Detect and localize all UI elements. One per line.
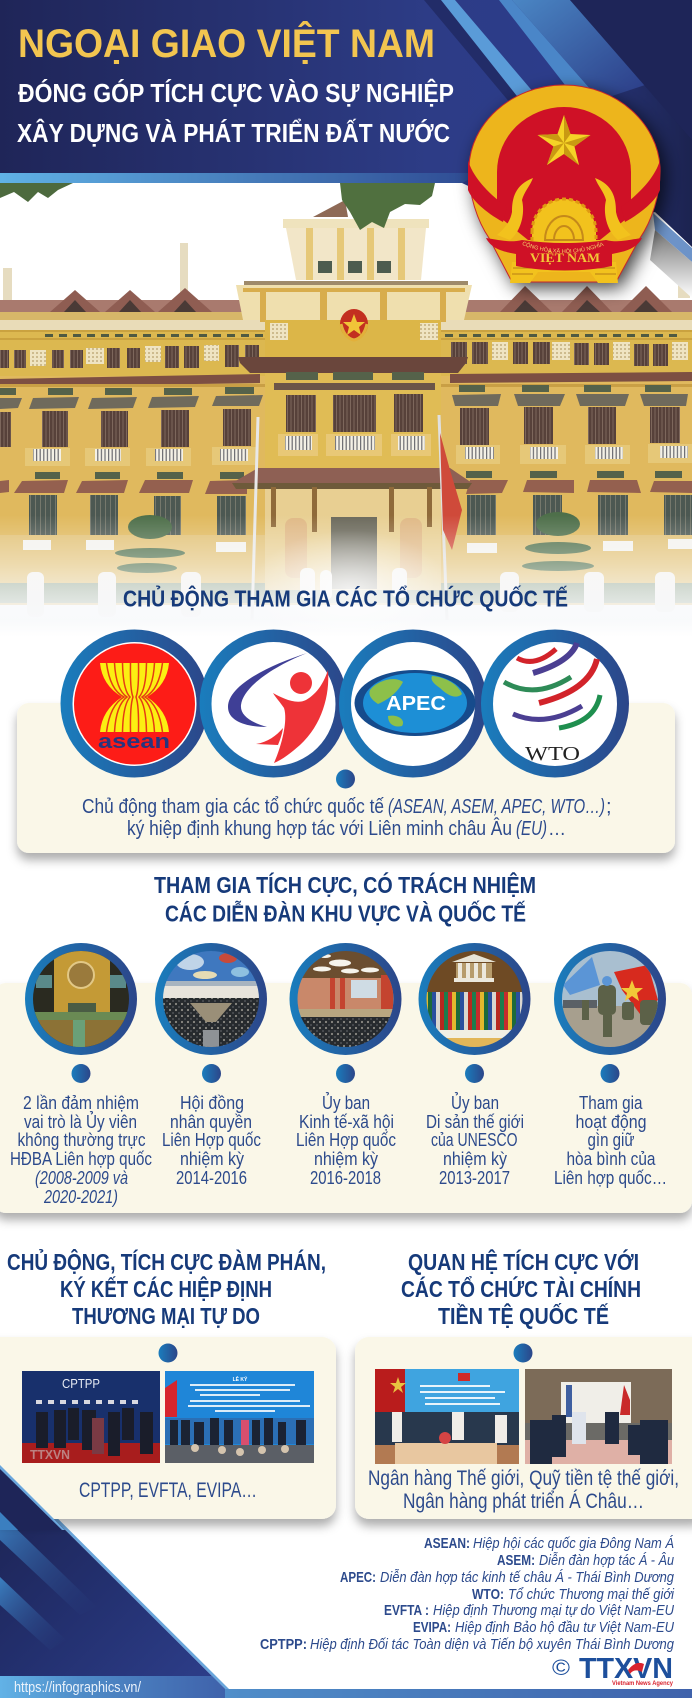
photo: UNESCO: [418, 943, 530, 1055]
heading: free trade agreements: THƯƠNG MẠI TỰ DO: [72, 1303, 260, 1329]
legend: abbreviations: ASEM:: [497, 1552, 535, 1569]
central block: [265, 320, 441, 360]
text: trade agreements: CPTPP, EVFTA, EVIPA…: [79, 1479, 257, 1502]
legend: abbreviations: EVFTA :: [384, 1602, 429, 1619]
legend: abbreviations: [260, 1535, 675, 1653]
text: organisations description: [82, 796, 612, 840]
text: column 4: Di sản thế giới: [426, 1112, 524, 1132]
logo: WTO: WTO: [525, 743, 580, 765]
ground floor windows: [29, 495, 692, 537]
balconies: [25, 444, 692, 466]
text: column 1: HĐBA Liên hợp quốc: [10, 1149, 152, 1169]
gold base steps: [510, 262, 618, 283]
photo: CPTPP signing: CPTPP: [62, 1376, 100, 1391]
heading: regional and international forums: [154, 871, 536, 926]
text: column 4: [426, 1092, 524, 1188]
mid wall: [0, 376, 692, 556]
heading: financial institutions: CÁC TỔ CHỨC TÀI CHÍNH: [401, 1275, 641, 1302]
emblem of Vietnam: VIỆT NAM: [530, 250, 600, 265]
text: column 4: Ủy ban: [451, 1092, 499, 1113]
title: NGOẠI GIAO VIỆT NAM: [18, 20, 435, 66]
photo: UN General Assembly: [25, 943, 137, 1055]
photo: CPTPP signing: [22, 1371, 160, 1463]
header banner: [0, 0, 692, 298]
text: organisations description: ký hiệp định khung hợp tác với Liên minh châu Âu: [127, 817, 512, 840]
legend: abbreviations: WTO:: [472, 1586, 504, 1603]
photo: EVFTA signing: [165, 1371, 314, 1463]
heading: free trade agreements: [7, 1247, 326, 1329]
small emblem on facade: [340, 309, 368, 340]
decoration: bottom left triangle: [0, 1519, 229, 1689]
heading: regional and international forums: CÁC DIỄN ĐÀN KHU VỰC VÀ QUỐC TẾ: [165, 898, 526, 926]
text: column 5: [554, 1093, 667, 1188]
logo: TTXVN: Vietnam News Agency: [612, 1681, 674, 1687]
photo: CPTPP signing: TTXVN: [30, 1447, 70, 1462]
text: organisations description: ;: [606, 796, 612, 818]
blue strip: [0, 173, 480, 183]
footer url: https://infographics.vn/: [14, 1679, 142, 1696]
emblem of Vietnam: [460, 78, 674, 301]
photo: ECOSOC chamber: [290, 943, 402, 1055]
text: column 2: Hội đồng: [180, 1093, 244, 1113]
text: financial institutions: Ngân hàng phát triển Á Châu…: [403, 1490, 644, 1513]
hedges: [0, 583, 692, 603]
photo: EVFTA signing: LỄ KÝ: [233, 1376, 248, 1383]
lower wall: [0, 535, 692, 605]
photo: Ministry of Foreign Affairs building: [0, 183, 692, 656]
dots row: [72, 1064, 620, 1083]
heading: free trade agreements: KÝ KẾT CÁC HIỆP ĐỊNH: [60, 1275, 272, 1302]
logo: APEC: APEC: [386, 693, 446, 715]
heading: international organisations: CHỦ ĐỘNG THAM GIA CÁC TỔ CHỨC QUỐC TẾ: [123, 584, 568, 612]
central roofs: [238, 357, 468, 373]
central windows and balconies: [286, 394, 423, 432]
porch: [265, 485, 441, 590]
legend: abbreviations: EVIPA:: [413, 1619, 451, 1636]
photo: IMF meeting: [525, 1369, 672, 1464]
photo: UN peacekeepers: [554, 943, 666, 1055]
logo: TTXVN: TTXVN: [579, 1653, 673, 1685]
photo: Human Rights Council: [155, 943, 267, 1055]
text: organisations description: (ASEAN, ASEM, APEC, WTO…): [388, 796, 605, 818]
text: financial institutions: [368, 1467, 679, 1513]
wing roofs: [0, 286, 692, 320]
logo: APEC: [339, 630, 487, 778]
central tower top: [236, 200, 472, 322]
rice sheaves: [497, 178, 533, 240]
text: column 4: 2013-2017: [439, 1168, 510, 1188]
text: column 1: 2 lần đảm nhiệm: [23, 1093, 139, 1113]
text: column 4: nhiệm kỳ: [443, 1149, 507, 1169]
text: column 1: vai trò là Ủy viên: [24, 1111, 137, 1132]
text: column 3: Liên Hợp quốc: [296, 1130, 396, 1150]
text: column 1: 2020-2021): [43, 1187, 118, 1207]
ribbon with text: [486, 238, 642, 270]
text: column 5: Liên hợp quốc…: [554, 1168, 667, 1188]
text: column 3: Kinh tế-xã hội: [299, 1112, 394, 1132]
text: column 5: gìn giữ: [588, 1130, 634, 1150]
chimneys: [3, 243, 690, 302]
upper windows: [0, 342, 668, 368]
small windows: [0, 385, 682, 479]
legend: abbreviations: ASEAN:: [424, 1535, 470, 1552]
text: column 1: [10, 1093, 152, 1207]
legend: abbreviations: APEC:: [340, 1569, 376, 1586]
text: column 3: [296, 1092, 396, 1188]
dots: [158, 1344, 532, 1362]
footer bar: [0, 1676, 692, 1698]
text: organisations description: (EU): [516, 818, 547, 840]
logo: ASEM: [200, 630, 348, 778]
side ribbons: [468, 160, 507, 222]
subtitle line 2: XÂY DỰNG VÀ PHÁT TRIỂN ĐẤT NƯỚC: [17, 118, 450, 148]
lower awnings: [0, 480, 692, 494]
panel: international organisations: [17, 703, 675, 853]
gear: [532, 199, 596, 248]
text: column 5: hoạt động: [576, 1112, 646, 1132]
text: column 4: của UNESCO: [431, 1130, 518, 1150]
text: column 2: 2014-2016: [176, 1168, 247, 1188]
heading: free trade agreements: CHỦ ĐỘNG, TÍCH CỰC ĐÀM PHÁN,: [7, 1247, 326, 1275]
panel: financial institutions: [355, 1337, 692, 1519]
star: [538, 115, 590, 165]
heading: financial institutions: [401, 1248, 641, 1329]
text: column 3: nhiệm kỳ: [314, 1149, 378, 1169]
panel: free trade agreements: [0, 1337, 336, 1519]
text: column 2: [162, 1093, 261, 1188]
logo: WTO: [481, 630, 629, 778]
topiary trees: [115, 512, 594, 573]
emblem of Vietnam: CỘNG HÒA XÃ HỘI CHỦ NGHĨA: [522, 242, 604, 254]
text: column 5: hòa bình của: [566, 1149, 656, 1169]
upper awnings: [0, 394, 688, 409]
decoration: triangle overlap on card: [0, 1465, 65, 1530]
flag and poles: [252, 415, 462, 620]
white fade: [0, 515, 692, 637]
tree above tower: [340, 183, 435, 230]
heading: financial institutions: TIỀN TỆ QUỐC TẾ: [438, 1302, 609, 1329]
text: column 2: nhân quyền: [170, 1112, 252, 1132]
tree: top left foliage: [0, 183, 73, 202]
text: column 2: nhiệm kỳ: [180, 1149, 244, 1169]
dot: [336, 770, 355, 788]
second floor windows: [0, 407, 680, 447]
text: organisations description: …: [548, 818, 566, 840]
text: column 3: 2016-2018: [310, 1168, 381, 1188]
text: column 3: Ủy ban: [322, 1092, 370, 1113]
panel: forums: [0, 983, 692, 1213]
text: column 1: không thường trực: [18, 1130, 146, 1150]
mosaic panels: [30, 342, 688, 366]
text: column 5: Tham gia: [579, 1093, 643, 1113]
honour guard: [27, 568, 675, 617]
heading: financial institutions: QUAN HỆ TÍCH CỰC VỚI: [408, 1248, 639, 1275]
logo: ASEAN: asean: [98, 731, 170, 753]
upper wing wall: [0, 320, 692, 376]
text: organisations description: Chủ động tham gia các tổ chức quốc tế: [82, 796, 384, 818]
photo: World Bank signing: [375, 1369, 519, 1464]
heading: regional and international forums: THAM GIA TÍCH CỰC, CÓ TRÁCH NHIỆM: [154, 871, 536, 898]
logo: ASEAN: [60, 630, 208, 778]
logo: TTXVN: ©: [552, 1655, 570, 1680]
text: column 2: Liên Hợp quốc: [162, 1130, 261, 1150]
legend: abbreviations: CPTPP:: [260, 1636, 307, 1653]
subtitle line 1: ĐÓNG GÓP TÍCH CỰC VÀO SỰ NGHIỆP: [18, 78, 454, 108]
text: column 1: (2008-2009 và: [35, 1168, 128, 1188]
